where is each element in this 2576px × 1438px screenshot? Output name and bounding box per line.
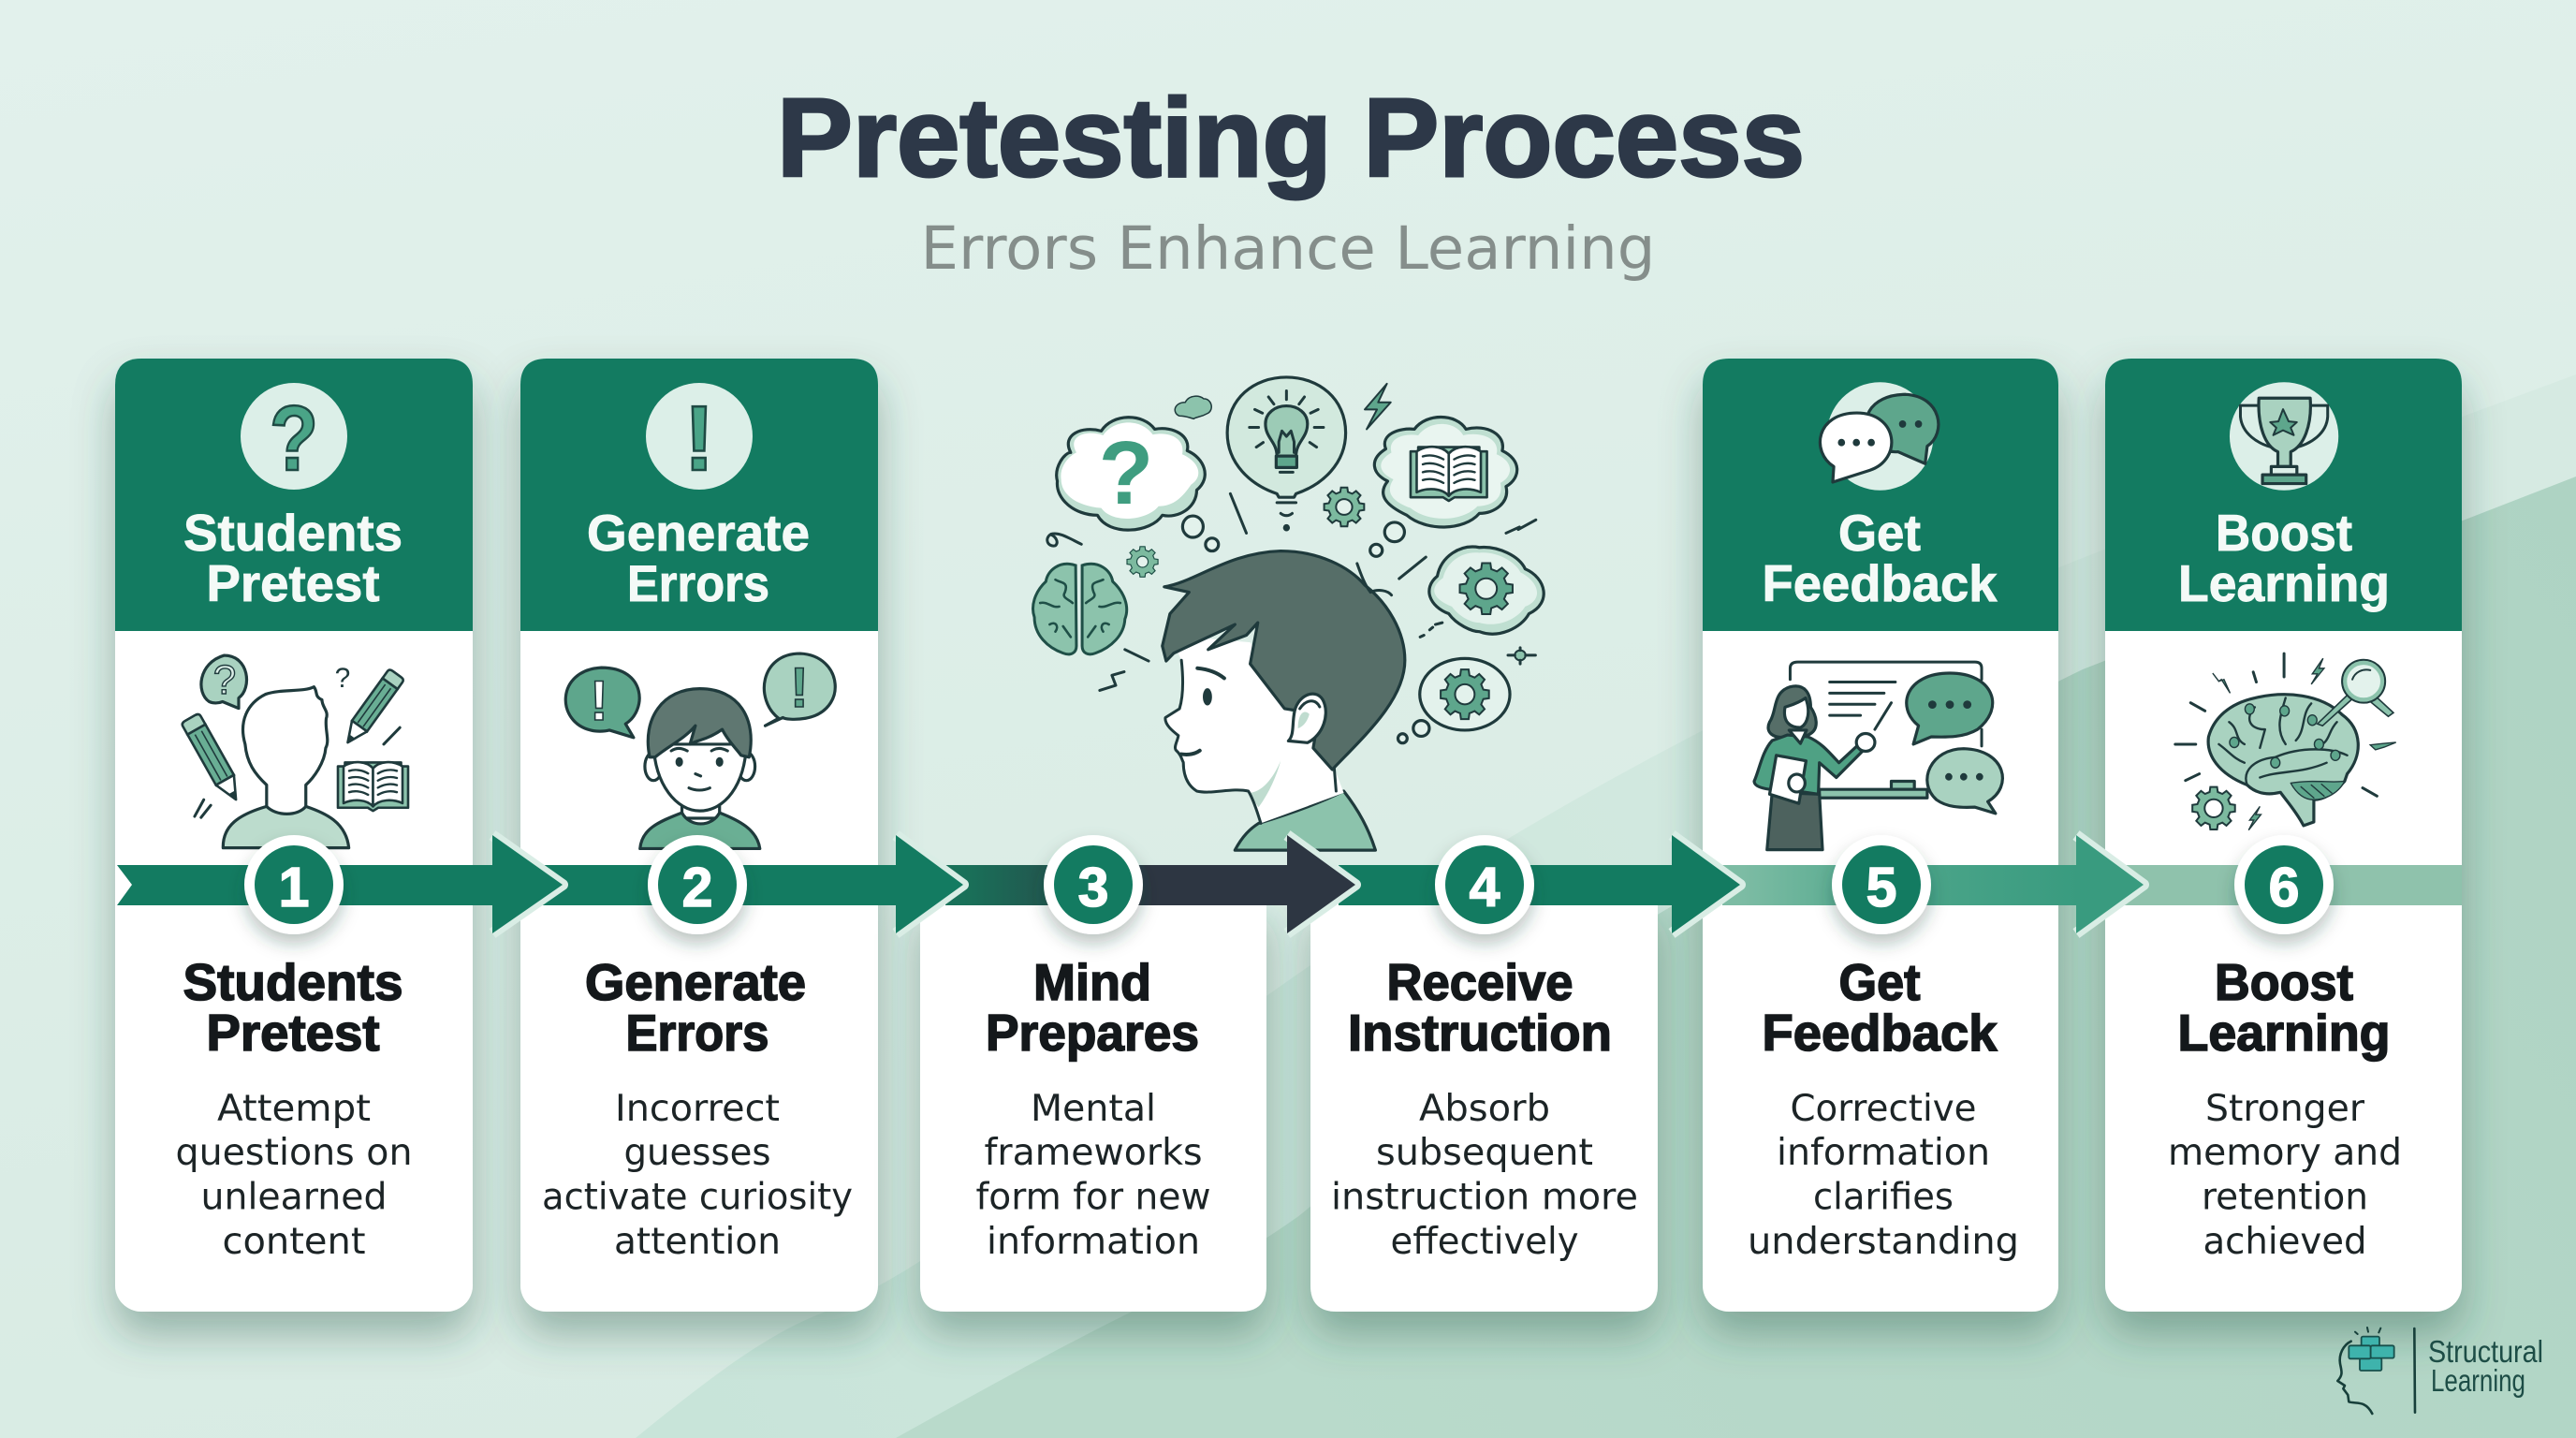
card 3 text: frameworks [985,1132,1202,1174]
card 1 header heading [183,504,402,612]
arrow 5 [1722,835,2144,933]
small gear [1325,488,1364,526]
panel: card 5 background [1703,359,2058,1312]
card 4 text: Absorb [1419,1088,1550,1130]
small question marks: ? [213,657,236,703]
illustration: teacher at whiteboard with feedback [1754,662,2002,850]
arrow 1 [117,835,563,933]
step number 4: 4 [1470,857,1500,918]
thought cloud: gear [1429,547,1544,634]
small cloud [1175,396,1211,418]
step number 2: 2 [682,857,712,918]
card 6 text: memory and [2168,1132,2402,1174]
arrow 3 [945,835,1355,933]
step number 2 [648,835,747,934]
step number 4 [1435,835,1534,934]
card 6 text [2168,953,2402,1263]
card 2 header heading: Errors [627,554,769,612]
card 1 header heading: Pretest [206,554,380,612]
gear [2192,787,2235,829]
illustration: smiling child with exclamation bubbles [565,653,835,848]
lightbulb bubble [1227,377,1346,497]
face and neck [1165,636,1344,823]
card 3 text: Mental [1031,1088,1156,1130]
card 2 text: attention [614,1221,781,1263]
card 6 text: Learning [2177,1004,2391,1062]
card 2 header heading: Generate [587,504,810,562]
card 3 text: information [987,1221,1200,1263]
logo: Structural Learning [2337,1328,2543,1414]
card 3 text: Prepares [986,1004,1199,1062]
thought cloud: question [1057,418,1205,530]
step number 6: 6 [2269,857,2299,918]
card 2 text: Errors [625,1004,769,1062]
card 4 text [1331,953,1638,1263]
panel: card 2 background [520,359,878,1312]
card 4 text: Receive [1387,953,1573,1011]
step number 5: 5 [1866,857,1896,918]
shirt [1235,791,1375,850]
icon: exclamation badge: ! [684,387,714,490]
illustration: child profile thinking [1033,377,1544,850]
card 1 text: unlearned [200,1176,388,1219]
eye [1203,688,1212,706]
card 5 header heading: Feedback [1762,554,1998,612]
card 2 text: Incorrect [615,1088,780,1130]
illustration: smiling child with exclamation bubbles: ! [790,656,809,719]
illustration: glowing brain with magnifier [2175,653,2396,830]
thought bubbles [1182,516,1203,537]
card 4 text: effectively [1391,1221,1578,1263]
step number 1 [244,835,344,934]
radiating lines and sparks [2175,653,2377,796]
illustration: student silhouette with pencils and book [181,655,408,848]
icon: question mark badge [241,383,347,490]
card 1 header heading: Students [183,504,402,562]
card 5 text [1748,953,2019,1263]
card 6 text: retention [2202,1176,2368,1219]
logo: Structural Learning: Structural [2428,1334,2543,1369]
hair [1163,551,1405,770]
card 1 text [176,953,412,1263]
segment 6 [2125,865,2462,905]
magnifier [2318,695,2393,726]
student silhouette [195,655,400,848]
card 1 text: content [223,1221,365,1263]
card 3 text: Mind [1033,953,1151,1011]
card 6 header heading: Learning [2178,554,2390,612]
teacher [1768,686,1816,737]
lightning bolt [1365,384,1391,429]
card 5 text: Corrective [1790,1088,1977,1130]
speech bubbles [565,668,639,738]
gear oval [1420,658,1510,730]
card 4 text: instruction more [1331,1176,1638,1219]
icon: exclamation badge [646,383,753,490]
step number 6 [2234,835,2334,934]
book [338,762,408,811]
step number 1: 1 [279,857,309,918]
card 5 text: information [1777,1132,1990,1174]
card 5 text: Feedback [1762,1004,1998,1062]
card 6 text: Boost [2215,953,2353,1011]
panel: card 3 background [920,899,1266,1312]
timeline arrow bar [117,835,2462,933]
card 1 text: Attempt [217,1088,371,1130]
panel: card 1 background [115,359,473,1312]
card 5 text: Get [1838,953,1921,1011]
card 6 text: achieved [2203,1221,2366,1263]
child [682,796,720,818]
panel: card 6 background [2105,359,2462,1312]
card 2 header heading [587,504,810,612]
card 6 header heading: Boost [2216,504,2352,562]
card 2 text [542,953,853,1263]
card 2 text: guesses [623,1132,771,1174]
ear [1288,694,1325,742]
feedback bubbles [1907,673,1993,744]
card 1 text: Students [183,953,402,1011]
card 4 text: Instruction [1348,1004,1612,1062]
logo: Structural Learning: Learning [2431,1363,2525,1398]
exclamation marks: ! [590,669,608,732]
illustration: student silhouette with pencils and book: ? [335,663,350,694]
icon: trophy badge [2230,382,2338,491]
pencils [181,713,245,805]
card 5 text: understanding [1748,1221,2019,1263]
card 5 header heading: Get [1838,504,1921,562]
card 2 text: Generate [585,953,806,1011]
card 6 header heading [2178,504,2390,612]
card 4 text: subsequent [1376,1132,1593,1174]
brain top view [1033,564,1076,654]
card 5 text: clarifies [1813,1176,1954,1219]
card 1 text: Pretest [206,1004,380,1062]
whiteboard [1790,662,1982,746]
card 3 text: form for new [975,1176,1211,1219]
title: Pretesting Process [777,76,1805,200]
card 3 text [975,953,1211,1263]
icon: question mark badge: ? [270,387,318,490]
step number 3: 3 [1078,857,1108,918]
arrow 4 [1339,835,1740,933]
card 2 text: activate curiosity [542,1176,853,1219]
brain [2208,695,2358,826]
arrow 2 [534,835,963,933]
step number 5 [1832,835,1931,934]
card 5 header heading [1762,504,1998,612]
icon: feedback chat badge [1820,382,1939,491]
card 1 text: questions on [176,1132,412,1174]
card 6 text: Stronger [2205,1088,2365,1130]
subtitle: Errors Enhance Learning [921,214,1655,283]
panel: card 4 background [1310,899,1658,1312]
question mark: ? [1099,423,1153,523]
step number 3 [1044,835,1143,934]
thought cloud: book [1374,418,1517,527]
